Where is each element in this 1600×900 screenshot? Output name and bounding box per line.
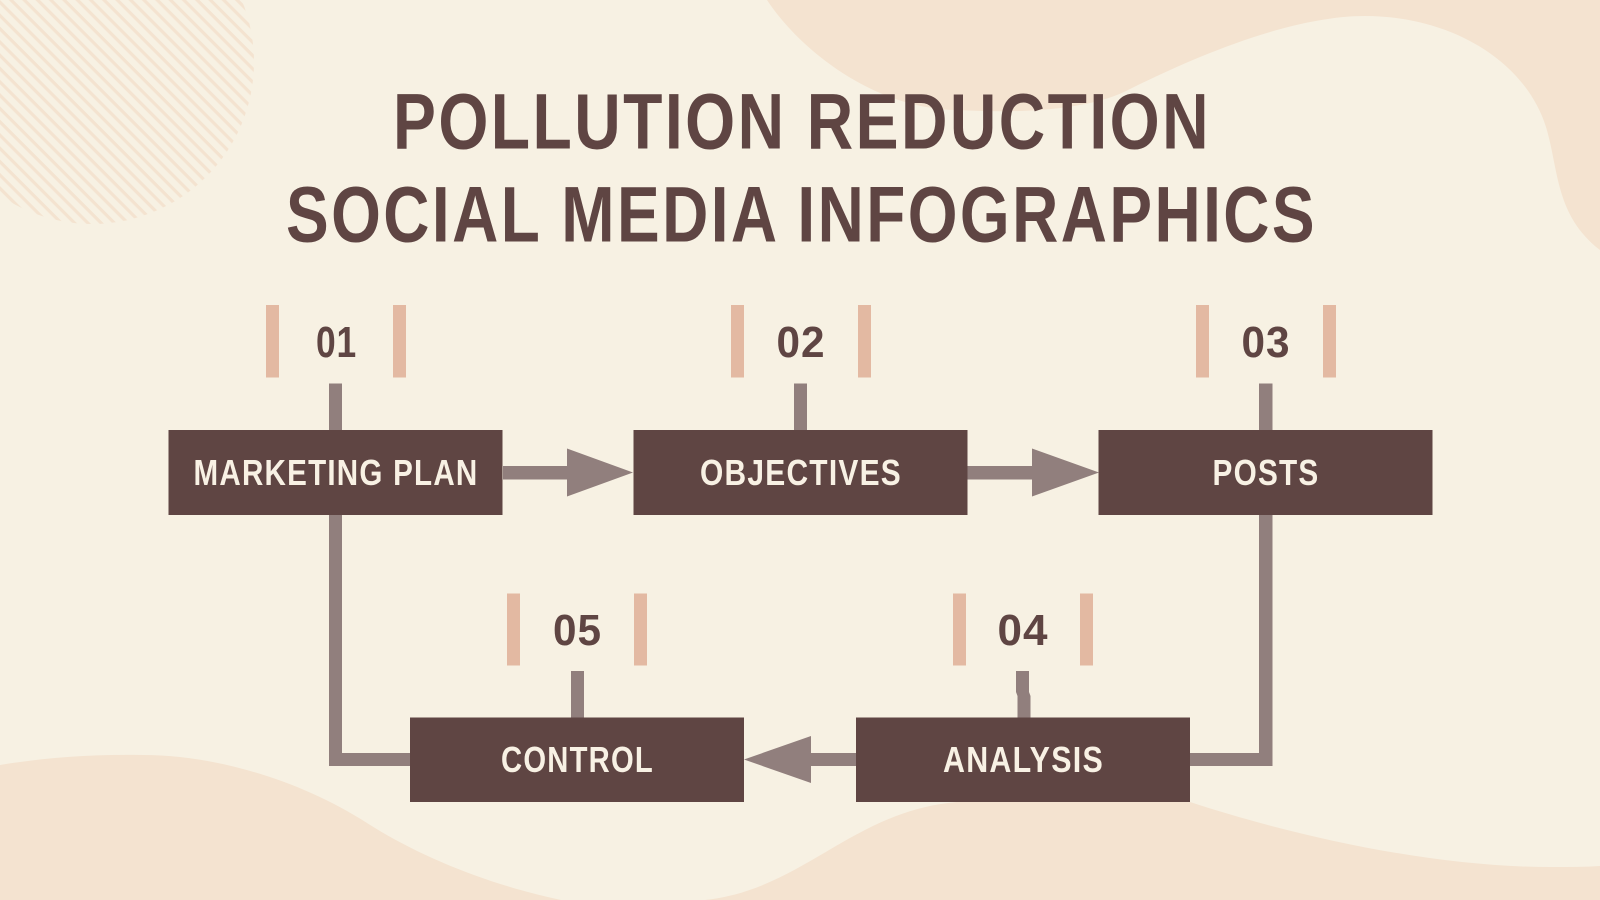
number 03 with side bars: 03 [1242,318,1290,367]
box: objectives: OBJECTIVES [700,452,902,493]
number 04 with side bars [953,594,1093,666]
arrow: analysis to control [744,736,856,783]
box: posts [1098,430,1432,515]
title: POLLUTION REDUCTION [393,76,1211,166]
stem 03 [1259,384,1272,430]
box: analysis: ANALYSIS [943,739,1104,780]
arrow: marketing plan to objectives [503,448,633,496]
stem 01 [329,384,342,430]
connector: posts down and across to analysis [1190,515,1272,766]
box: marketing plan: MARKETING PLAN [194,452,478,493]
box: marketing plan [168,430,502,515]
step 01 [168,305,502,515]
title [286,76,1317,258]
background blob: top right [767,0,1600,250]
background blob: bottom right [705,793,1600,900]
number 04 with side bars: 04 [998,606,1048,655]
background blob: bottom left [0,755,561,900]
title: SOCIAL MEDIA INFOGRAPHICS [286,170,1317,258]
number 01 with side bars [266,305,406,378]
number 03 with side bars [1196,305,1336,378]
stem 05 [571,671,584,718]
number 01 with side bars: 01 [316,318,357,367]
box: objectives [634,430,968,515]
step 05 [410,594,744,802]
number 02 with side bars: 02 [776,318,826,367]
step 02 [634,305,968,515]
box: posts: POSTS [1212,452,1320,493]
box: analysis [856,718,1190,802]
number 05 with side bars: 05 [553,606,602,655]
step 04 [856,594,1190,802]
number 05 with side bars [507,594,647,666]
box: control [410,718,744,802]
connector: marketing plan down and across to control [329,515,410,766]
stem 02 [794,384,807,430]
stem 04 [1016,671,1030,718]
number 02 with side bars [731,305,871,378]
step 03 [1098,305,1432,515]
hatched circle decoration [0,0,254,224]
box: control: CONTROL [501,739,654,780]
arrow: objectives to posts [967,448,1099,496]
